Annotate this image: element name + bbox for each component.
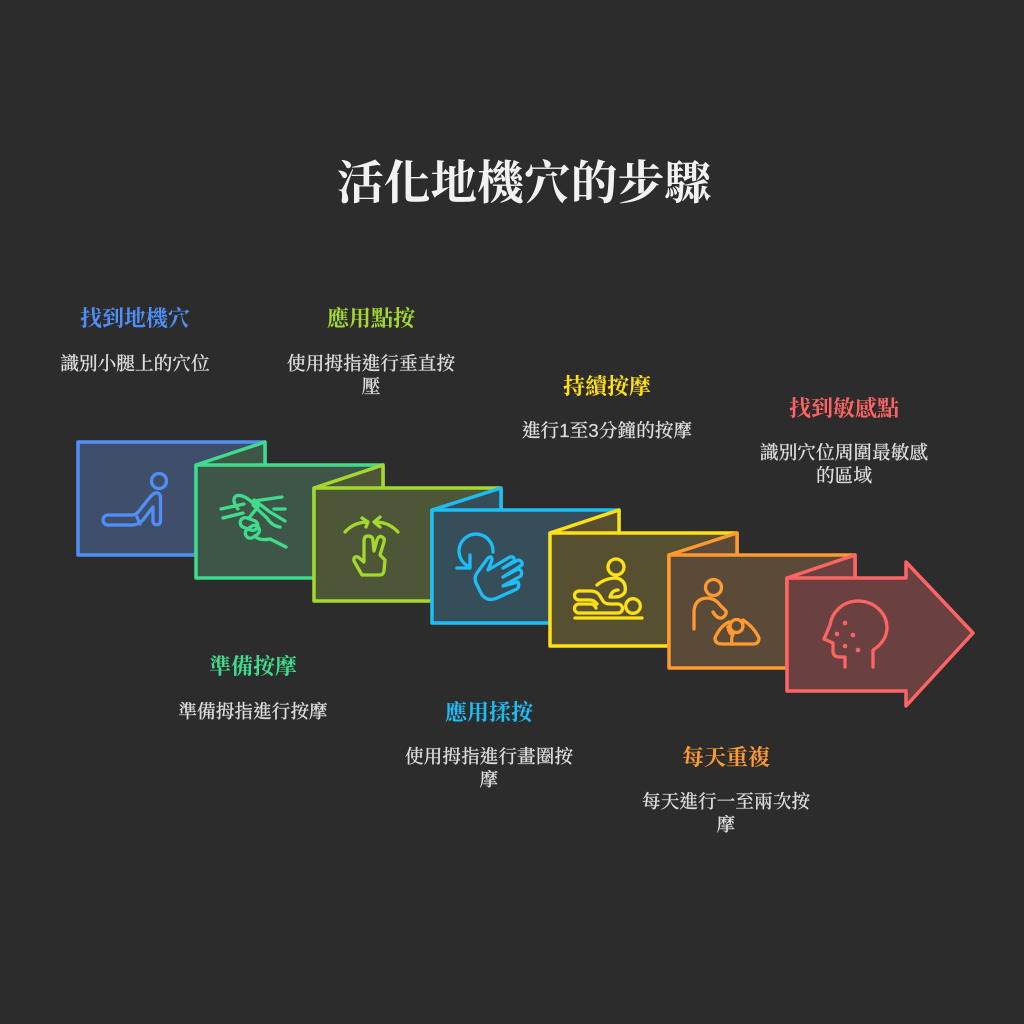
icon: hand gripping thumb bbox=[221, 495, 286, 547]
panel 7: red arrow bbox=[787, 555, 973, 706]
step 6 text: 每天進行一至兩次按 bbox=[642, 791, 810, 812]
step 1 text: 找到地機穴 bbox=[80, 306, 190, 331]
panel 1: blue bbox=[78, 442, 265, 555]
step 4 text: 應用揉按 bbox=[445, 700, 534, 725]
step 4 text: 摩 bbox=[480, 769, 499, 790]
title: 活化地機穴的步驟 bbox=[337, 158, 711, 210]
step 3 text: 使用拇指進行垂直按 bbox=[287, 353, 455, 374]
icon: head with sensitive points bbox=[824, 601, 887, 667]
step 4 text bbox=[405, 700, 573, 790]
step 3 text: 壓 bbox=[362, 376, 381, 397]
step 7 text: 識別穴位周圍最敏感 bbox=[760, 442, 928, 463]
step 6 text bbox=[642, 745, 810, 835]
step 3 text: 應用點按 bbox=[327, 306, 416, 331]
icon: stretching figure bbox=[103, 474, 166, 525]
panel 4: cyan bbox=[432, 488, 619, 623]
step 7 text: 找到敏感點 bbox=[789, 396, 899, 421]
icon: person tending a baby bbox=[694, 580, 759, 644]
step 1 text bbox=[60, 306, 210, 374]
step 3 text bbox=[287, 306, 455, 397]
step 5 text bbox=[522, 374, 692, 441]
panel 2: green bbox=[196, 442, 383, 578]
step 2 text bbox=[178, 654, 328, 722]
step 4 text: 使用拇指進行畫圈按 bbox=[405, 746, 573, 767]
step 7 text bbox=[760, 396, 928, 486]
panel 3: lime bbox=[314, 465, 501, 601]
icon: two fingers press bbox=[345, 517, 398, 575]
step 7 text: 的區域 bbox=[816, 465, 872, 486]
panel 5: yellow bbox=[550, 510, 737, 646]
step 1 text: 識別小腿上的穴位 bbox=[60, 353, 210, 374]
step 6 text: 每天重複 bbox=[682, 745, 770, 770]
step 5 text: 持續按摩 bbox=[563, 374, 651, 399]
step 2 text: 準備按摩 bbox=[209, 654, 297, 679]
step 2 text: 準備拇指進行按摩 bbox=[178, 701, 328, 722]
icon: massage on table bbox=[574, 559, 642, 618]
step 6 text: 摩 bbox=[717, 814, 736, 835]
icon: hand with circular arrow bbox=[457, 534, 522, 599]
panel 6: orange bbox=[669, 533, 855, 668]
step 5 text: 進行1至3分鐘的按摩 bbox=[522, 420, 692, 441]
